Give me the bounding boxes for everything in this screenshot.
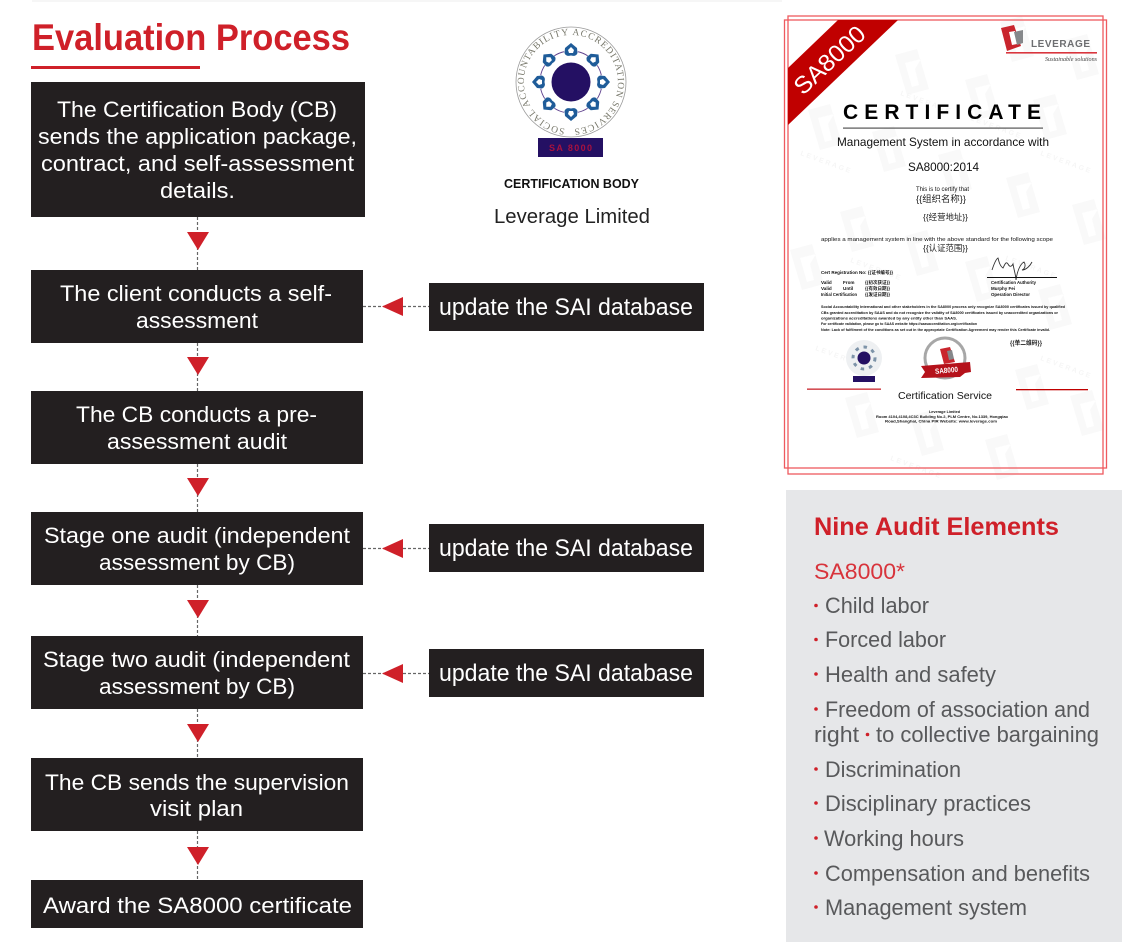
step 4: assessment by CB) [99,550,295,575]
certificate body text [821,135,1053,253]
database update 2 [429,524,704,572]
certificate fine print [821,305,1065,332]
certificate double border [784,16,1106,474]
database update 3: update the SAI database [439,660,693,687]
database update 3 [429,649,704,697]
step 3: The CB conducts a pre- [76,402,317,427]
database update 2: update the SAI database [439,535,693,562]
QR code placeholder: {{单二维码}} [1010,339,1043,347]
arrow left 1 [382,297,403,316]
watermark pattern: LEVERAGE [889,455,943,481]
step 7: Award the SA8000 certificate [43,893,352,918]
certificate details: {{有效日期}} [865,285,890,292]
arrow down 2 [187,357,209,375]
arrow down 5 [187,724,209,742]
arrow down 3 [187,478,209,496]
certificate details: Operation Director [991,292,1030,297]
watermark pattern: LEVERAGE [814,345,868,371]
step 7 [31,880,363,928]
certificate heading: CERTIFICATE [843,101,1041,124]
certificate body text: SA8000:2014 [908,160,979,174]
SA8000 seal: SA8000 [935,365,958,376]
step 5 [31,636,363,709]
watermark pattern: LEVERAGE [1039,150,1093,176]
certificate body text: This is to certify that [916,187,969,193]
certificate body text: {{经营地址}} [923,212,968,222]
signature [987,258,1057,280]
element list: Disciplinary practices [825,791,1031,816]
ribbon: SA8000 [788,20,898,125]
logo: SAAS accreditation seal: SA 8000 [549,143,592,153]
certificate fine print: organizations accreditations awarded by any entity other than SAAS. [821,316,957,320]
panel: certificate [784,15,1107,481]
element list: Health and safety [825,662,997,687]
certificate body text: applies a management system in line with the above standard for the following scope [821,237,1053,243]
certificate body text: {{认证范围}} [923,243,968,253]
certification body name: Leverage Limited [494,206,650,228]
logo: Leverage [1001,25,1098,63]
certification body label: CERTIFICATION BODY [504,176,639,191]
step 1: details. [160,178,235,203]
step 6: The CB sends the supervision [45,770,349,795]
certificate fine print: For certificate validation, please go to SAAS website https://saasaccreditation.org/certification [821,322,977,326]
title: Evaluation Process [32,17,350,58]
element list: Freedom of association and [825,697,1090,722]
element list: Forced labor [825,627,946,652]
certificate details: {{初次获证}} [865,279,890,286]
certificate details: Valid [821,286,832,291]
SA8000 seal [921,338,971,378]
certificate details: Valid [821,280,832,285]
arrow down 1 [187,232,209,250]
panel heading: Nine Audit Elements [814,513,1059,541]
certificate body text: Management System in accordance with [837,135,1049,149]
certificate details: Murphy Fei [991,286,1015,291]
database update 1 [429,283,704,331]
certificate details: From [843,280,854,285]
step 1 [31,82,365,217]
watermark pattern [790,16,1106,481]
logo: Leverage: Sustainable solutions [1045,57,1098,63]
database update 1: update the SAI database [439,294,693,321]
logo: Leverage: LEVERAGE [1031,39,1090,50]
watermark pattern: LEVERAGE [969,115,1023,141]
element list: Child labor [825,593,929,618]
arrow left 2 [382,539,403,558]
certificate fine print: CBs granted accreditation by SAAS and do not recognize the validity of SA8000 certificates issued by unaccredited organizations or [821,311,1059,315]
step 5: assessment by CB) [99,674,295,699]
step 2 [31,270,363,343]
connector lines [198,217,429,880]
element list: to collective bargaining [876,722,1099,747]
step 6: visit plan [150,796,243,821]
red rule right [1016,389,1088,390]
issuer address: Road,Shanghai, China PIR Website: www.leverage.com [885,420,997,424]
certificate fine print: Social Accountability International and other stakeholders in the SA8000 process only recognize SA8000 certificates issued by qualified [821,305,1065,309]
watermark pattern: LEVERAGE [799,150,853,176]
element list: Management system [825,895,1027,920]
element list: Discrimination [825,757,961,782]
step 3 [31,391,363,464]
step 2: The client conducts a self- [60,281,332,306]
certification service label: Certification Service [898,390,992,402]
step 1: contract, and self-assessment [41,151,355,176]
element list [814,593,1099,920]
arrow down 4 [187,600,209,618]
certificate body text: {{组织名称}} [916,193,966,204]
element list: right [814,722,860,747]
panel subheading: SA8000* [814,559,905,584]
small SAAS logo [846,340,882,382]
certificate details: Until [843,286,853,291]
watermark pattern: LEVERAGE [1004,255,1058,281]
certificate details [821,269,1036,298]
step 4 [31,512,363,585]
certificate fine print: Note: Lack of fulfilment of the conditions as set out in the appropriate Certification Agreement may render this Certificate invalid. [821,328,1050,332]
red rule left [807,388,881,390]
issuer address [876,410,1009,424]
step 5: Stage two audit (independent [43,647,351,672]
title underline [31,66,200,69]
arrow left 3 [382,664,403,683]
element list: Working hours [824,826,964,851]
issuer address: Room 4104,4108,4C3C Building No.2, PLM Centre, No.1339, Hongqiao [876,415,1009,419]
element list: Compensation and benefits [825,861,1090,886]
ribbon: SA8000: SA8000 [789,21,871,100]
watermark pattern: LEVERAGE [899,90,953,116]
step 3: assessment audit [107,429,288,454]
flowchart: evaluation process [31,82,704,928]
certificate details: Initial Certification [821,292,857,297]
issuer address: Leverage Limited [929,410,960,414]
step 6 [31,758,363,831]
certificate details: Cert Registration No: {{证书编号}} [821,269,893,276]
watermark pattern: LEVERAGE [849,257,903,283]
watermark pattern: LEVERAGE [1039,355,1093,381]
step 1: sends the application package, [38,124,357,149]
step 4: Stage one audit (independent [44,523,351,548]
logo: SAAS accreditation seal: SOCIAL ACCOUNTABILITY ACCREDITATION SERVICES [518,28,624,135]
panel: nine audit elements [786,490,1122,942]
certificate details: Certification Authority [991,280,1036,285]
arrow down 6 [187,847,209,865]
certificate details: {{发证日期}} [865,291,890,298]
step 1: The Certification Body (CB) [57,97,337,122]
step 2: assessment [136,308,259,333]
